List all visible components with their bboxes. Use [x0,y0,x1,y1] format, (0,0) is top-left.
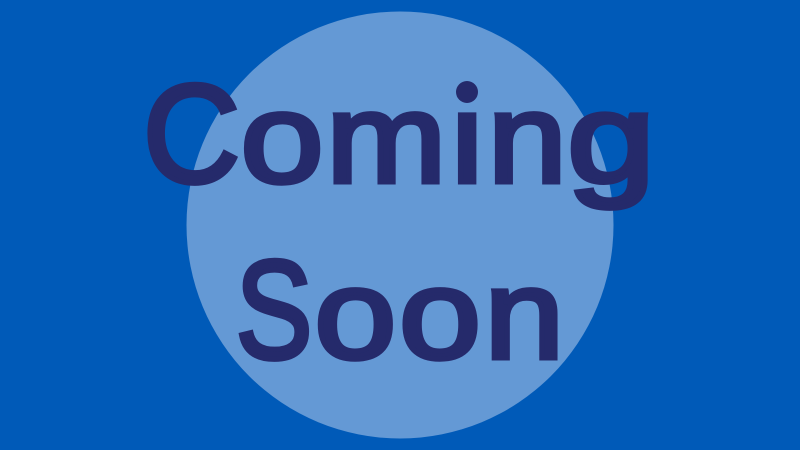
heading: Coming [147,81,648,211]
heading: Coming: n [488,67,567,209]
circle backdrop [186,12,614,438]
heading: Soon: o [399,243,481,385]
heading: Coming: i [451,67,483,209]
heading: Coming: g [567,67,655,209]
heading: Coming: m [326,67,446,209]
heading: Soon: n [485,243,564,385]
heading: Soon: o [314,243,396,385]
heading: Coming: o [241,67,324,209]
poster: coming soon [147,12,648,438]
heading: Soon: S [236,231,312,388]
heading: Coming: C [143,55,240,212]
